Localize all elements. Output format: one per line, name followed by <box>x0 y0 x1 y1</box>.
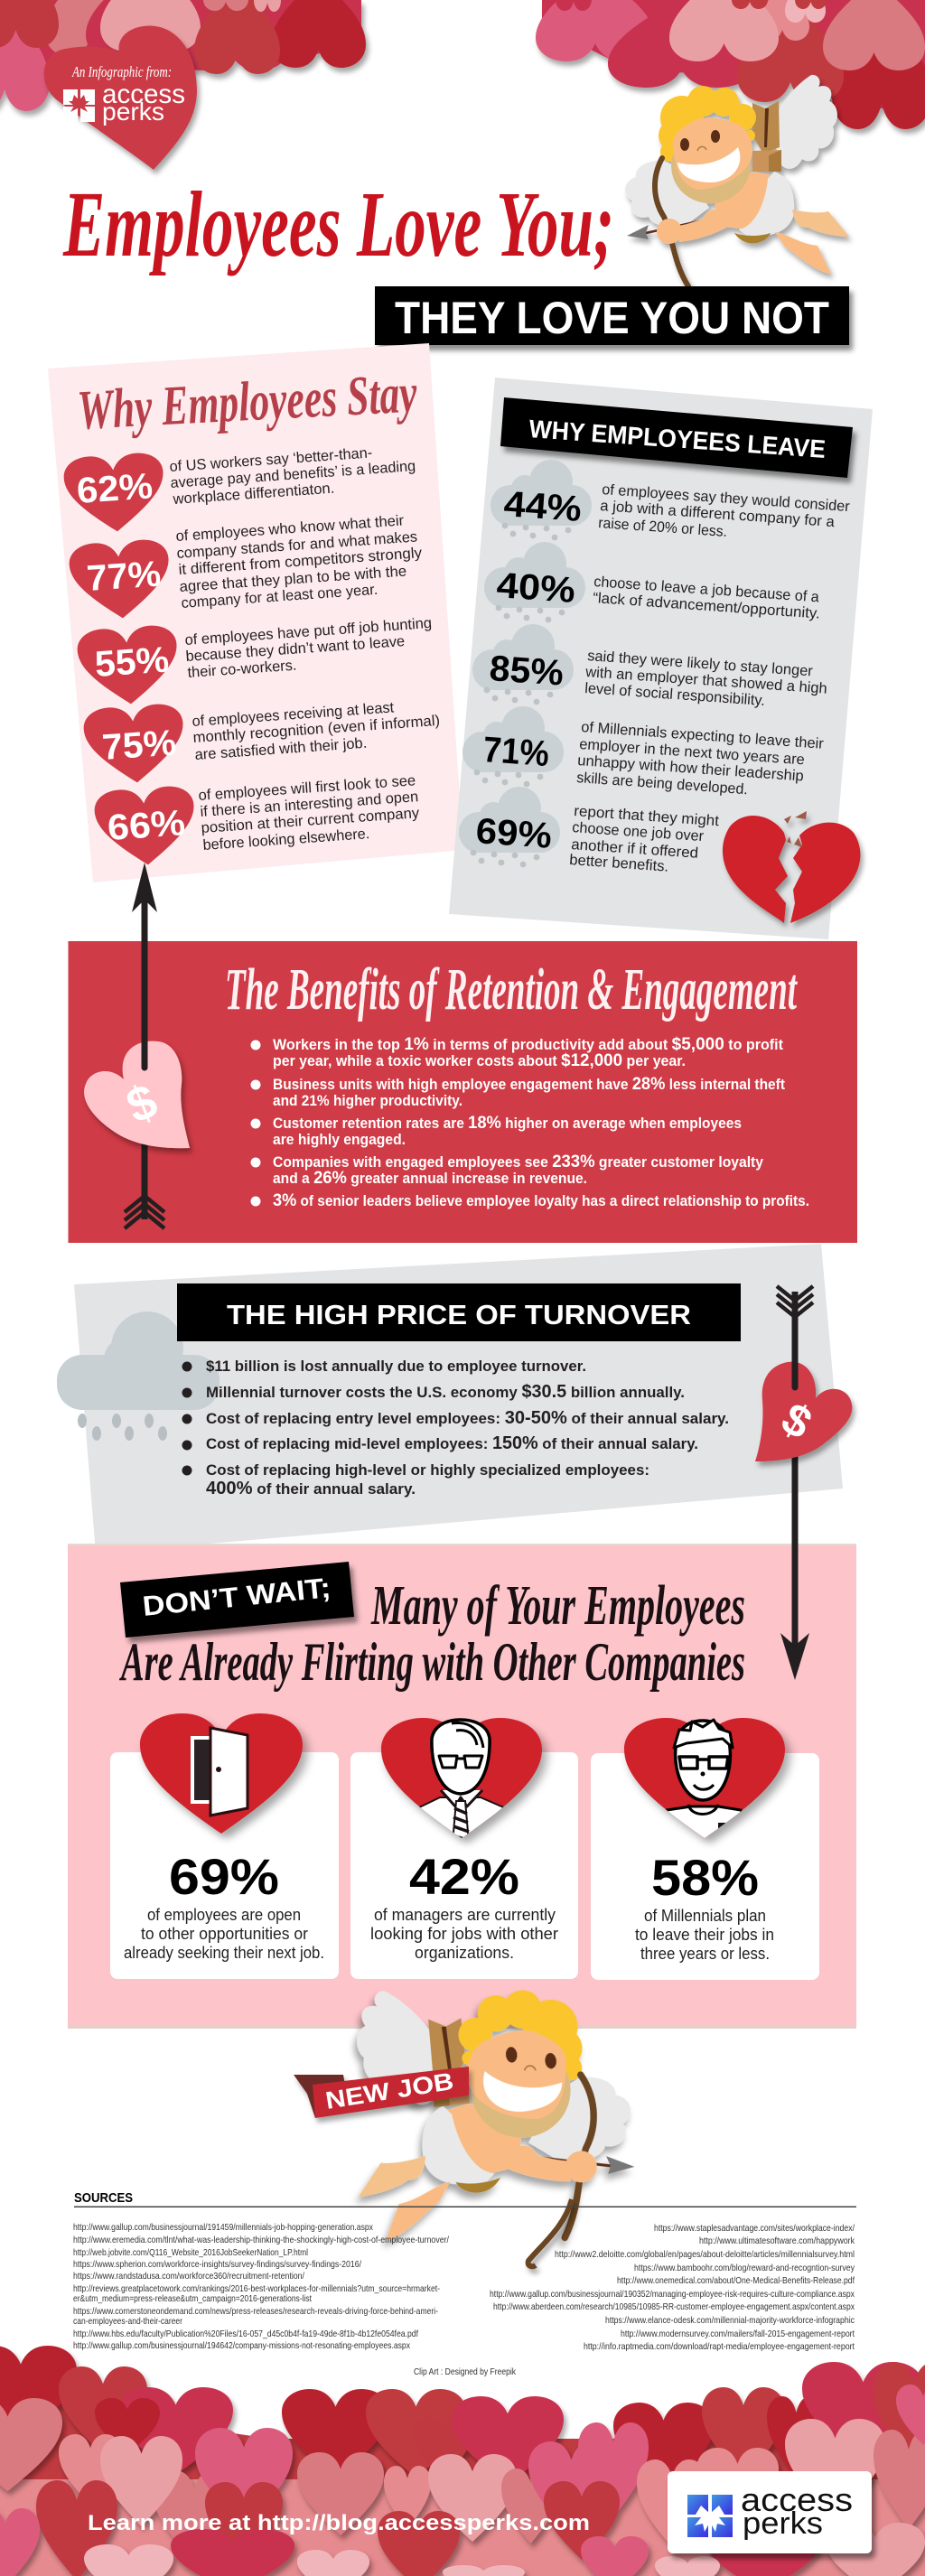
card: 58%: of Millennials plan <box>644 1906 766 1925</box>
icon: logo heart with access perks: An Infographic from: <box>71 63 172 80</box>
source list left: http://www.eremedia.com/tlnt/what-was-leadership-thinking-the-shockingly-high-cost-of-employee-turnover/ <box>73 2235 449 2245</box>
banner: don't wait <box>120 1562 354 1638</box>
bullet list: Workers in the top 1% in terms of productivity add about $5,000 to profit <box>273 1034 783 1054</box>
logo card <box>668 2471 872 2553</box>
bullet list: 3% of senior leaders believe employee loyalty has a direct relationship to profits. <box>273 1190 809 1210</box>
icon: logo heart with access perks: perks <box>102 98 164 126</box>
icon: pink dollar heart: $ <box>119 1074 164 1134</box>
source list right: http://www.gallup.com/businessjournal/190352/managing-employee-risk-requires-culture-compliance.aspx <box>490 2289 855 2300</box>
subtitle banner: THEY LOVE YOU NOT <box>395 293 829 343</box>
icon: heart with millennial <box>624 1718 785 1843</box>
stat: 62%: 62% <box>76 466 154 511</box>
heading banner <box>500 397 853 478</box>
stat: 44%: raise of 20% or less. <box>598 515 728 540</box>
credit: Clip Art : Designed by Freepik <box>414 2366 517 2377</box>
illustration: cupid with bow <box>625 75 849 286</box>
source list right: https://www.staplesadvantage.com/sites/workplace-index/ <box>654 2223 855 2234</box>
stat: 85%: said they were likely to stay longer <box>587 648 814 679</box>
icon: red dollar heart <box>755 1355 852 1461</box>
card: 42% <box>350 1718 578 1979</box>
source list left: http://www.hbs.edu/faculty/Publication%20Files/16-057_d45c0b4f-fa19-49de-8f1b-4b12fe054fea.pdf <box>73 2329 418 2339</box>
hearts: top right cluster <box>536 0 925 129</box>
stat: 55%: because they didn’t want to leave <box>185 633 406 665</box>
stat: 66%: 66% <box>107 803 186 848</box>
stat: 71%: of Millennials expecting to leave their <box>581 719 825 752</box>
stat: 77%: of employees who know what their <box>175 512 405 545</box>
stat: 69%: better benefits. <box>569 852 669 875</box>
bullet list: Companies with engaged employees see 233% greater customer loyalty <box>273 1152 764 1171</box>
bullet list: $11 billion is lost annually due to employee turnover. <box>206 1358 586 1375</box>
card: 69%: already seeking their next job. <box>124 1943 324 1962</box>
stat: 85%: 85% <box>488 649 565 694</box>
icon: red dollar heart: $ <box>773 1393 820 1449</box>
icon: logo heart with access perks: access <box>102 79 185 109</box>
source list left: https://www.cornerstoneondemand.com/news/press-releases/research-reveals-driving-force-behind-ameri- <box>73 2306 438 2317</box>
call to action: Learn more at http://blog.accessperks.com <box>88 2511 590 2535</box>
stat: 66%: of employees will first look to see <box>198 772 416 804</box>
stat: 77%: company stands for and what makes <box>176 528 418 562</box>
bullet list: and 21% higher productivity. <box>273 1093 462 1109</box>
stat: 75%: of employees receiving at least <box>192 699 395 730</box>
card: 42%: looking for jobs with other <box>370 1924 558 1943</box>
bullet list: Cost of replacing entry level employees: 30-50% of their annual salary. <box>206 1408 729 1428</box>
source list left: http://reviews.greatplacetowork.com/rankings/2016-best-workplaces-for-millennials?utm_source=hrmarket- <box>73 2283 440 2294</box>
stat: 62%: workplace differentiaton. <box>172 481 335 508</box>
icon: rain cloud <box>57 1311 220 1441</box>
card: 42%: organizations. <box>415 1943 514 1962</box>
arrow: left arrow with pink money heart <box>84 863 190 1228</box>
source list left: er&utm_medium=press-release&utm_campaign=2016-generations-list <box>73 2293 312 2304</box>
card: 69% <box>110 1713 339 1979</box>
stat: 77%: agree that they plan to be with the <box>179 563 407 595</box>
stat: 77%: 77% <box>86 554 162 599</box>
stat: 66%: before looking elsewhere. <box>202 826 370 854</box>
bullet list: 400% of their annual salary. <box>206 1479 416 1498</box>
panel: benefits of retention and engagement <box>69 941 857 1243</box>
title: Employees Love You; <box>62 173 614 276</box>
hearts: bottom cluster <box>0 2346 925 2576</box>
source list left: http://www.gallup.com/businessjournal/191459/millennials-job-hopping-generation.aspx <box>73 2222 374 2233</box>
heading banner: THE HIGH PRICE OF TURNOVER <box>227 1299 691 1330</box>
stat: 44%: of employees say they would consider <box>602 481 851 515</box>
stat: 69% <box>459 787 720 875</box>
banner: new job: NEW JOB <box>323 2067 455 2114</box>
heading banner <box>177 1283 741 1341</box>
icon: pink dollar heart <box>84 1030 190 1148</box>
bullet list <box>182 1358 729 1498</box>
heading banner: WHY EMPLOYEES LEAVE <box>528 415 827 463</box>
card: 69%: 69% <box>169 1848 279 1905</box>
stat: 69%: 69% <box>474 811 553 856</box>
hearts: top left cluster <box>0 0 366 111</box>
stat: 71%: unhappy with how their leadership <box>577 752 804 784</box>
bullet list: Cost of replacing mid-level employees: 150% of their annual salary. <box>206 1433 698 1453</box>
stat: 66% <box>93 772 420 868</box>
card: 58%: 58% <box>651 1849 759 1906</box>
source list right <box>490 2223 855 2352</box>
icon: broken heart <box>723 811 860 923</box>
stat: 66%: position at their current company <box>201 805 420 836</box>
source list right: https://www.elance-odesk.com/millennial-majority-workforce-infographic <box>605 2315 855 2326</box>
card: 42%: 42% <box>409 1848 519 1905</box>
banner: new job <box>294 2067 469 2118</box>
bullet list <box>251 1034 809 1210</box>
stat: 62% <box>62 444 416 535</box>
stat: 69%: report that they might <box>574 803 720 829</box>
source list right: http://www.ultimatesoftware.com/happywork <box>699 2235 855 2246</box>
stat: 75%: monthly recognition (even if informal) <box>192 713 441 746</box>
card: 58% <box>591 1718 819 1980</box>
card: 42%: of managers are currently <box>374 1905 556 1924</box>
bullet list: per year, while a toxic worker costs about $12,000 per year. <box>273 1050 686 1070</box>
stat: 55%: 55% <box>94 639 170 685</box>
card: 69%: to other opportunities or <box>141 1924 308 1943</box>
heading <box>118 1575 745 1692</box>
source list right: http://info.raptmedia.com/download/rapt-media/employee-engagement-report <box>584 2341 855 2352</box>
icon: heart with open door <box>140 1713 303 1834</box>
source list left <box>73 2222 449 2351</box>
sources <box>73 2191 856 2377</box>
source list right: http://www.modernsurvey.com/mailers/fall-2015-engagement-report <box>621 2329 855 2339</box>
bullet list: Millennial turnover costs the U.S. economy $30.5 billion annually. <box>206 1382 685 1402</box>
stat: 40%: choose to leave a job because of a <box>593 574 820 605</box>
panel: why employees leave <box>449 378 873 939</box>
stat: 62%: average pay and benefits’ is a leading <box>170 458 416 491</box>
stat: 85%: level of social responsibility. <box>584 680 765 709</box>
icon: heart with manager <box>381 1718 542 1843</box>
stat: 77%: company for at least one year. <box>181 582 378 611</box>
source list right: http://www.onemedical.com/about/One-Medical-Benefits-Release.pdf <box>617 2275 855 2286</box>
source list right: https://www.bamboohr.com/blog/reward-and-recogntion-survey <box>634 2263 855 2273</box>
stat: 55% <box>76 615 433 707</box>
stat: 77% <box>68 512 423 621</box>
stat: 75%: are satisfied with their job. <box>194 735 368 763</box>
card: 69%: of employees are open <box>147 1905 301 1924</box>
logo card: perks <box>743 2506 823 2541</box>
stat: 44%: a job with a different company for a <box>600 498 836 530</box>
card: 58%: three years or less. <box>640 1944 770 1963</box>
illustration: cupid with new job banner <box>294 1966 643 2266</box>
stat: 40% <box>484 542 820 622</box>
stat: 71% <box>462 706 825 798</box>
arrow: right arrow with red money heart <box>755 1286 852 1680</box>
panel: don't wait <box>68 1544 856 2029</box>
stat: 55%: of employees have put off job hunting <box>184 615 433 649</box>
stat: 77%: it different from competitors strongly <box>178 545 423 578</box>
icon: access perks logo <box>687 2495 733 2537</box>
heading: SOURCES <box>74 2191 133 2206</box>
source list left: http://web.jobvite.com/Q116_Website_2016JobSeekerNation_LP.html <box>73 2247 308 2258</box>
stat: 85%: with an employer that showed a high <box>584 664 827 697</box>
card: 58%: to leave their jobs in <box>635 1925 774 1944</box>
stat: 71%: employer in the next two years are <box>579 736 805 768</box>
icon: logo heart with access perks <box>44 26 197 170</box>
stat: 44%: 44% <box>502 484 583 529</box>
source list left: https://www.randstadusa.com/workforce360/recruitment-retention/ <box>73 2271 304 2282</box>
source list right: http://www2.deloitte.com/global/en/pages/about-deloitte/articles/millennialsurvey.html <box>555 2249 855 2260</box>
stat: 71%: 71% <box>481 730 550 774</box>
stat: 69%: another if it offered <box>571 836 699 862</box>
stat: 62%: of US workers say ‘better-than- <box>169 444 373 475</box>
bullet list: Business units with high employee engagement have 28% less internal theft <box>273 1074 785 1094</box>
source list right: http://www.aberdeen.com/research/10985/10985-RR-customer-employee-engagement.aspx/content.aspx <box>493 2301 855 2312</box>
stat: 75% <box>82 699 441 786</box>
source list left: http://www.gallup.com/businessjournal/194642/company-missions-not-resonating-employees.aspx <box>73 2340 411 2351</box>
bullet list: and a 26% greater annual increase in revenue. <box>273 1168 587 1188</box>
bullet list: Customer retention rates are 18% higher on average when employees <box>273 1113 742 1133</box>
heading: Why Employees Stay <box>76 362 419 442</box>
stat: 69%: choose one job over <box>572 819 705 845</box>
stat: 40%: “lack of advancement/opportunity. <box>593 590 820 622</box>
stat: 85% <box>472 624 827 709</box>
source list left: can-employees-and-their-career <box>73 2316 182 2327</box>
stat: 44% <box>491 460 851 540</box>
logo card: access <box>741 2481 853 2518</box>
stat: 66%: if there is an interesting and open <box>200 789 419 820</box>
panel: why employees stay <box>48 343 463 882</box>
stat: 40%: 40% <box>495 565 576 611</box>
bullet list: Cost of replacing high-level or highly specialized employees: <box>206 1461 649 1479</box>
bullet list: are highly engaged. <box>273 1132 406 1148</box>
stat: 75%: 75% <box>101 723 177 768</box>
stat: 55%: their co-workers. <box>187 658 297 681</box>
source list left: https://www.spherion.com/workforce-insights/survey-findings/survey-findings-2016/ <box>73 2259 361 2270</box>
panel: high price of turnover <box>57 1244 843 1554</box>
banner: don't wait: DON’T WAIT; <box>141 1572 332 1622</box>
stat: 71%: skills are being developed. <box>576 770 749 798</box>
